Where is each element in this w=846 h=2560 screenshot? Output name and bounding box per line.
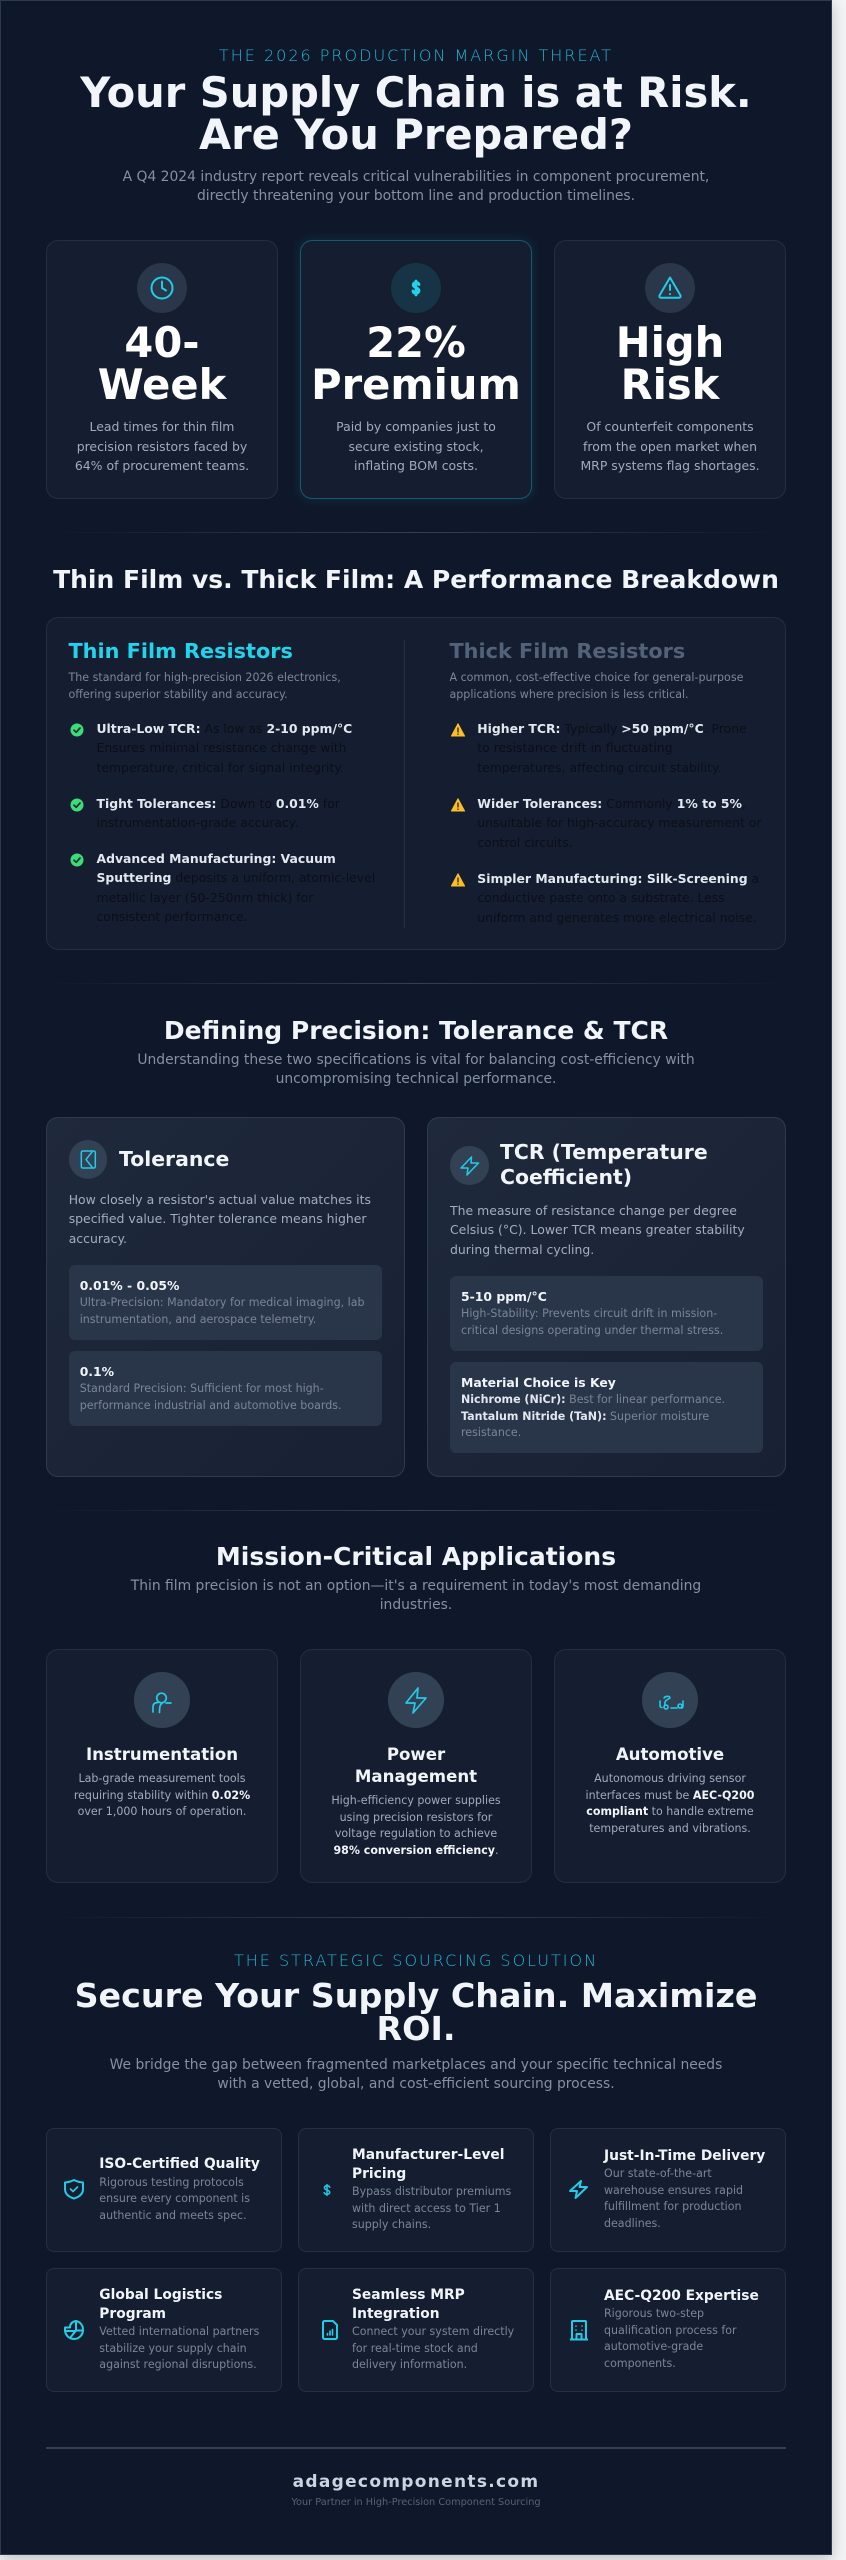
- thin film description: [68, 671, 341, 701]
- section subtitle: Understanding these two specifications is vital for balancing cost-efficiency with: [137, 1052, 695, 1068]
- spec detail: resistance.: [461, 1426, 521, 1439]
- section subtitle: Thin film precision is not an option—it's a requirement in today's most demanding: [131, 1578, 701, 1594]
- feature text: [352, 2184, 511, 2234]
- stat value: High: [616, 318, 724, 367]
- icon: check: [70, 798, 84, 812]
- thin film list: tolerances: [96, 796, 340, 830]
- icon: dollar: [391, 263, 441, 313]
- footer tagline: Your Partner in High-Precision Component Sourcing: [291, 2497, 541, 2508]
- application card: power: [300, 1649, 532, 1883]
- feature title: Integration: [352, 2306, 440, 2322]
- application description: compliant to handle extreme: [586, 1805, 754, 1818]
- spec detail: instrumentation, and aerospace telemetry.: [80, 1313, 316, 1326]
- spec value: Material Choice is Key: [461, 1375, 616, 1390]
- thick film list: tolerances: [477, 796, 762, 850]
- thick film list: manufacturing: Simpler Manufacturing: Silk-Screening a: [477, 871, 759, 886]
- thin film list: TCR: Ultra-Low TCR: As low as 2-10 ppm/°C: [96, 721, 352, 736]
- solution title: [75, 1976, 757, 2048]
- stat value: [311, 318, 521, 409]
- stat card: high risk: [554, 240, 786, 499]
- section subtitle: uncompromising technical performance.: [276, 1071, 556, 1087]
- stat description: [75, 419, 249, 473]
- spec detail: [461, 1393, 725, 1439]
- thin film list: TCR: Ensures minimal resistance change with: [96, 740, 346, 755]
- footer brand: adagecomponents.com: [293, 2472, 539, 2492]
- section subtitle: [130, 1578, 701, 1613]
- application description: [331, 1794, 501, 1857]
- panel description: during thermal cycling.: [450, 1242, 594, 1257]
- stat card: 40-week: [46, 240, 278, 499]
- main title: Are You Prepared?: [199, 110, 633, 159]
- panel title: [500, 1140, 708, 1189]
- panel: TCR: [427, 1117, 786, 1477]
- header subtitle: [122, 169, 709, 204]
- thin film description: offering superior stability and accuracy.: [68, 688, 288, 701]
- solution title: ROI.: [376, 2009, 455, 2048]
- application title: Management: [355, 1767, 477, 1786]
- thick film list: TCR: Higher TCR: Typically >50 ppm/°C. Prone: [477, 721, 747, 736]
- feature text: automotive-grade: [604, 2340, 703, 2353]
- section heading: defining precision: Defining Precision: Tolerance & TCR: [164, 1016, 668, 1045]
- spec detail: Standard Precision: Sufficient for most high-: [80, 1382, 324, 1395]
- stat description: Paid by companies just to: [336, 419, 496, 434]
- stat description: Of counterfeit components: [586, 419, 754, 434]
- feature text: Bypass distributor premiums: [352, 2185, 511, 2198]
- section eyebrow: THE STRATEGIC SOURCING SOLUTION: [234, 1951, 598, 1970]
- panel description: How closely a resistor's actual value matches its: [69, 1192, 371, 1207]
- icon: building: [567, 2318, 591, 2342]
- feature text: with direct access to Tier 1: [352, 2202, 501, 2215]
- thick film list: TCR: [477, 721, 747, 775]
- thick film description: applications where precision is less critical.: [450, 688, 689, 701]
- feature text: Vetted international partners: [99, 2325, 259, 2338]
- icon: check: [70, 854, 84, 866]
- stat description: precision resistors faced by: [77, 438, 247, 454]
- feature text: supply chains.: [352, 2218, 431, 2231]
- feature title: Seamless MRP: [352, 2286, 465, 2302]
- thin film list: tolerances: instrumentation-grade accuracy.: [96, 815, 298, 830]
- solution subtitle: We bridge the gap between fragmented marketplaces and your specific technical needs: [110, 2057, 722, 2073]
- spec detail: Nichrome (NiCr): Best for linear performance.: [461, 1393, 725, 1406]
- application description: interfaces must be AEC-Q200: [586, 1789, 754, 1802]
- icon: warning triangle: [645, 263, 695, 313]
- panel title: TCR (Temperature: [500, 1140, 708, 1164]
- icon: warning: [451, 723, 465, 736]
- feature card: AEC-Q200: [550, 2268, 786, 2392]
- spec detail: [461, 1307, 723, 1337]
- feature card: logistics: [46, 2268, 282, 2392]
- thin film description: The standard for high-precision 2026 electronics,: [68, 671, 341, 684]
- panel description: The measure of resistance change per degree: [450, 1203, 737, 1218]
- thick film heading: Thick Film Resistors: [450, 639, 685, 663]
- feature text: deadlines.: [604, 2217, 661, 2230]
- thin film list: manufacturing: consistent performance.: [96, 909, 248, 924]
- application description: using precision resistors for: [340, 1811, 492, 1824]
- thin film list: TCR: temperature, critical for signal integrity.: [96, 760, 344, 775]
- feature title: [352, 2146, 505, 2184]
- feature text: against regional disruptions.: [99, 2358, 257, 2371]
- panel title: Tolerance: [119, 1147, 229, 1171]
- feature title: Program: [99, 2306, 166, 2322]
- feature text: warehouse ensures rapid: [604, 2184, 743, 2197]
- stat description: MRP systems flag shortages.: [580, 458, 760, 473]
- thick film list: manufacturing: uniform and generates more electrical noise.: [477, 910, 757, 925]
- feature text: authentic and meets spec.: [99, 2209, 247, 2222]
- feature title: ISO-Certified Quality: [99, 2156, 260, 2172]
- feature title: [99, 2286, 222, 2324]
- panel description: accuracy.: [69, 1231, 127, 1246]
- thick film list: manufacturing: conductive paste onto a substrate. Less: [477, 890, 725, 905]
- feature title: Pricing: [352, 2166, 406, 2182]
- icon: warning: [451, 798, 465, 812]
- feature text: stabilize your supply chain: [99, 2342, 247, 2355]
- solution subtitle: with a vetted, global, and cost-efficient sourcing process.: [217, 2076, 615, 2092]
- spec detail: Ultra-Precision: Mandatory for medical imaging, lab: [80, 1296, 364, 1309]
- stat description: [580, 419, 760, 473]
- feature card: just-in-time: [550, 2128, 786, 2252]
- section heading: applications: Mission-Critical Applications: [216, 1542, 616, 1571]
- section heading: thin vs thick: Thin Film vs. Thick Film: A Performance Breakdown: [53, 565, 779, 594]
- feature card: manufacturer pricing: [298, 2128, 534, 2252]
- icon: car: [642, 1672, 698, 1728]
- feature card: ISO quality: [46, 2128, 282, 2252]
- feature title: Global Logistics: [99, 2286, 222, 2302]
- icon: bolt: [567, 2177, 591, 2201]
- feature text: components.: [604, 2357, 676, 2370]
- solution subtitle: [110, 2057, 722, 2092]
- spec detail: [80, 1382, 342, 1412]
- application title: Power: [387, 1745, 445, 1764]
- feature text: ensure every component is: [99, 2192, 250, 2205]
- spec detail: Tantalum Nitride (TaN): Superior moisture: [461, 1410, 709, 1423]
- stat value: [98, 318, 227, 409]
- thick film list: TCR: temperatures, affecting circuit stability.: [477, 760, 721, 775]
- header subtitle: directly threatening your bottom line and production timelines.: [197, 188, 635, 204]
- thick film list: manufacturing: [477, 871, 759, 925]
- application description: High-efficiency power supplies: [331, 1794, 501, 1807]
- application description: Autonomous driving sensor: [594, 1772, 746, 1785]
- application description: voltage regulation to achieve: [335, 1827, 497, 1840]
- header subtitle: A Q4 2024 industry report reveals critical vulnerabilities in component procurement,: [123, 169, 709, 185]
- feature text: [604, 2166, 743, 2232]
- icon: instrumentation: [134, 1672, 190, 1728]
- icon: tolerance: [69, 1140, 107, 1179]
- panel description: [69, 1192, 371, 1246]
- panel: tolerance: [46, 1117, 405, 1477]
- section subtitle: industries.: [380, 1597, 452, 1613]
- thin film list: manufacturing: [96, 851, 375, 924]
- feature text: [604, 2306, 737, 2372]
- thick film list: tolerances: Wider Tolerances: Commonly 1% to 5%,: [477, 796, 746, 811]
- stat value: 22%: [366, 318, 466, 367]
- stat description: [336, 419, 496, 473]
- feature text: Rigorous testing protocols: [99, 2176, 244, 2188]
- thick film list: tolerances: control circuits.: [477, 835, 573, 850]
- panel description: [450, 1203, 745, 1257]
- feature card: MRP integration: [298, 2268, 534, 2392]
- stat description: from the open market when: [583, 438, 757, 454]
- feature text: Rigorous two-step: [604, 2307, 704, 2320]
- panel: comparison: [46, 617, 786, 950]
- application title: Instrumentation: [86, 1745, 238, 1764]
- feature text: delivery information.: [352, 2358, 467, 2371]
- application description: 98% conversion efficiency.: [333, 1844, 499, 1857]
- spec box: standard precision: [69, 1351, 382, 1426]
- feature title: [352, 2286, 465, 2324]
- spec box: high stability: [450, 1276, 763, 1351]
- spec value: 5-10 ppm/°C: [461, 1289, 547, 1304]
- stat description: 64% of procurement teams.: [75, 458, 249, 473]
- feature text: [99, 2176, 250, 2222]
- panel title: Coefficient): [500, 1165, 632, 1189]
- spec box: ultra precision: [69, 1265, 382, 1340]
- feature text: Our state-of-the-art: [604, 2167, 712, 2180]
- spec value: 0.01% - 0.05%: [80, 1278, 179, 1293]
- stat value: 40-: [124, 318, 200, 367]
- spec detail: performance industrial and automotive boards.: [80, 1399, 342, 1412]
- application description: over 1,000 hours of operation.: [78, 1805, 246, 1818]
- feature text: fulfillment for production: [604, 2200, 741, 2213]
- stat value: Risk: [621, 360, 719, 409]
- feature title: Manufacturer-Level: [352, 2146, 505, 2162]
- main title: [80, 68, 752, 159]
- spec detail: critical designs operating under thermal stress.: [461, 1324, 723, 1337]
- icon: bolt: [450, 1146, 489, 1185]
- application card: automotive: [554, 1649, 786, 1883]
- thin film list: manufacturing: metallic layer (50-250nm thick) for: [96, 890, 313, 905]
- feature text: qualification process for: [604, 2324, 737, 2337]
- panel description: Celsius (°C). Lower TCR means greater stability: [450, 1222, 745, 1237]
- thin film list: manufacturing: Sputtering deposits a uniform, atomic-level: [96, 870, 375, 885]
- section subtitle: [137, 1052, 695, 1087]
- stat value: [616, 318, 724, 409]
- icon: dollar: [323, 2184, 331, 2196]
- application title: Automotive: [616, 1745, 724, 1764]
- icon: globe pie: [62, 2318, 86, 2342]
- thick film list: TCR: to resistance drift in fluctuating: [477, 740, 673, 755]
- application title: [355, 1745, 477, 1786]
- main title: Your Supply Chain is at Risk.: [80, 68, 752, 117]
- stat value: Premium: [311, 360, 521, 409]
- spec detail: High-Stability: Prevents circuit drift in mission-: [461, 1307, 717, 1320]
- solution title: Secure Your Supply Chain. Maximize: [75, 1976, 757, 2015]
- feature title: AEC-Q200 Expertise: [604, 2288, 759, 2304]
- feature text: [99, 2324, 259, 2374]
- spec value: 0.1%: [80, 1364, 114, 1379]
- icon: power bolt: [388, 1672, 444, 1728]
- feature title: Just-In-Time Delivery: [604, 2148, 765, 2164]
- application description: Lab-grade measurement tools: [78, 1772, 246, 1785]
- feature text: for real-time stock and: [352, 2342, 478, 2355]
- icon: document chart: [319, 2318, 341, 2342]
- thick film description: [450, 671, 743, 701]
- stat value: Week: [98, 360, 226, 409]
- thin film heading: Thin Film Resistors: [68, 639, 293, 663]
- thin film list: manufacturing: Advanced Manufacturing: Vacuum: [96, 851, 336, 866]
- thin film list: tolerances: Tight Tolerances: Down to 0.01% for: [96, 796, 340, 811]
- feature text: [352, 2324, 514, 2374]
- icon: shield: [64, 2179, 84, 2200]
- spec detail: [80, 1296, 364, 1326]
- feature text: Connect your system directly: [352, 2325, 514, 2338]
- panel description: specified value. Tighter tolerance means higher: [69, 1211, 367, 1226]
- application card: instrumentation: [46, 1649, 278, 1883]
- stat card: 22% premium (highlighted): [300, 240, 532, 499]
- icon: check: [70, 724, 84, 736]
- spec box: material choice: [450, 1362, 763, 1453]
- application description: temperatures and vibrations.: [589, 1822, 751, 1835]
- footer: [0, 2470, 832, 2514]
- header eyebrow: THE 2026 PRODUCTION MARGIN THREAT: [219, 46, 613, 65]
- stat description: Lead times for thin film: [90, 419, 234, 434]
- icon: warning: [451, 873, 465, 886]
- stat description: inflating BOM costs.: [354, 458, 478, 473]
- thick film description: A common, cost-effective choice for general-purpose: [450, 671, 743, 684]
- stat description: secure existing stock,: [348, 438, 484, 454]
- icon: clock: [137, 263, 187, 313]
- thick film list: tolerances: unsuitable for high-accuracy measurement or: [477, 815, 761, 830]
- thin film list: TCR: [96, 721, 352, 775]
- application description: requiring stability within 0.02%: [74, 1789, 250, 1802]
- application description: [74, 1772, 250, 1818]
- application description: [586, 1772, 754, 1835]
